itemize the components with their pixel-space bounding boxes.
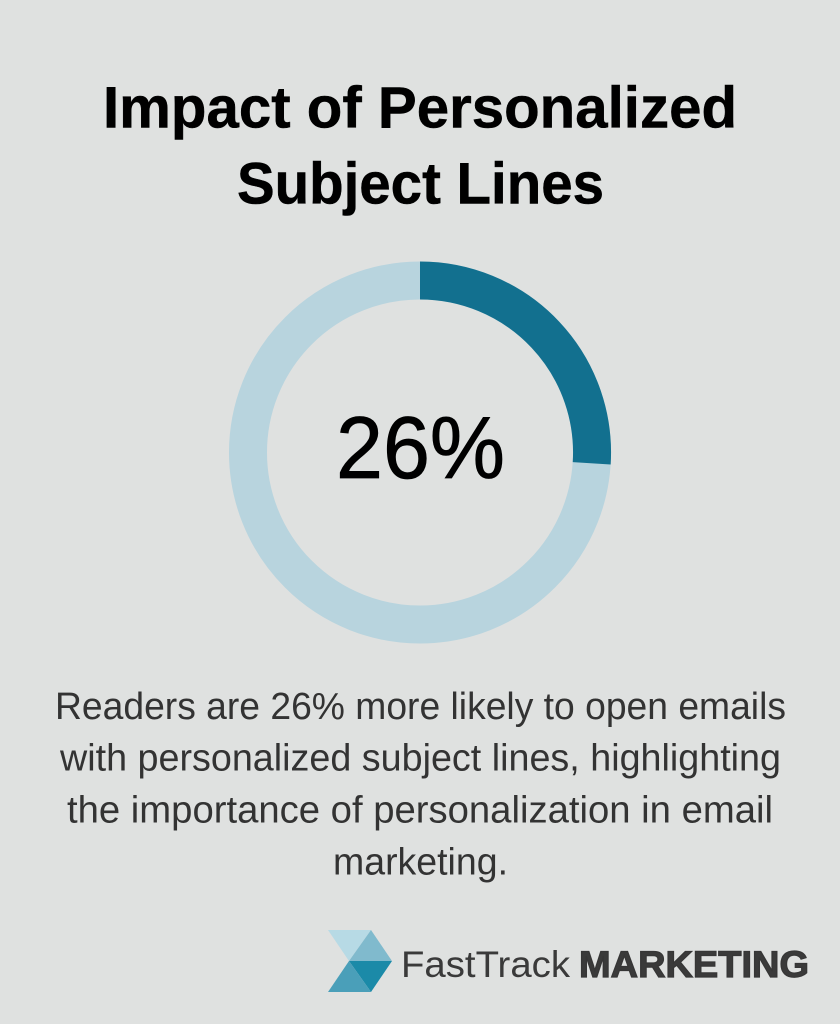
description text: Readers are 26% more likely to open emails (55, 686, 786, 728)
title: Impact of Personalized (103, 76, 737, 140)
icon: logo mark (328, 930, 392, 992)
logo wordmark (401, 944, 809, 985)
donut value: 26% (336, 398, 505, 497)
description text (55, 686, 786, 884)
logo wordmark: FastTrack (401, 944, 571, 985)
description text: with personalized subject lines, highlighting (59, 738, 781, 780)
logo (328, 930, 809, 992)
description text: the importance of personalization in email (67, 790, 773, 832)
title: Subject Lines (237, 152, 604, 216)
donut chart: 26% (248, 280, 592, 624)
title (103, 76, 737, 216)
logo wordmark: MARKETING (579, 944, 809, 985)
description text: marketing. (333, 842, 508, 884)
